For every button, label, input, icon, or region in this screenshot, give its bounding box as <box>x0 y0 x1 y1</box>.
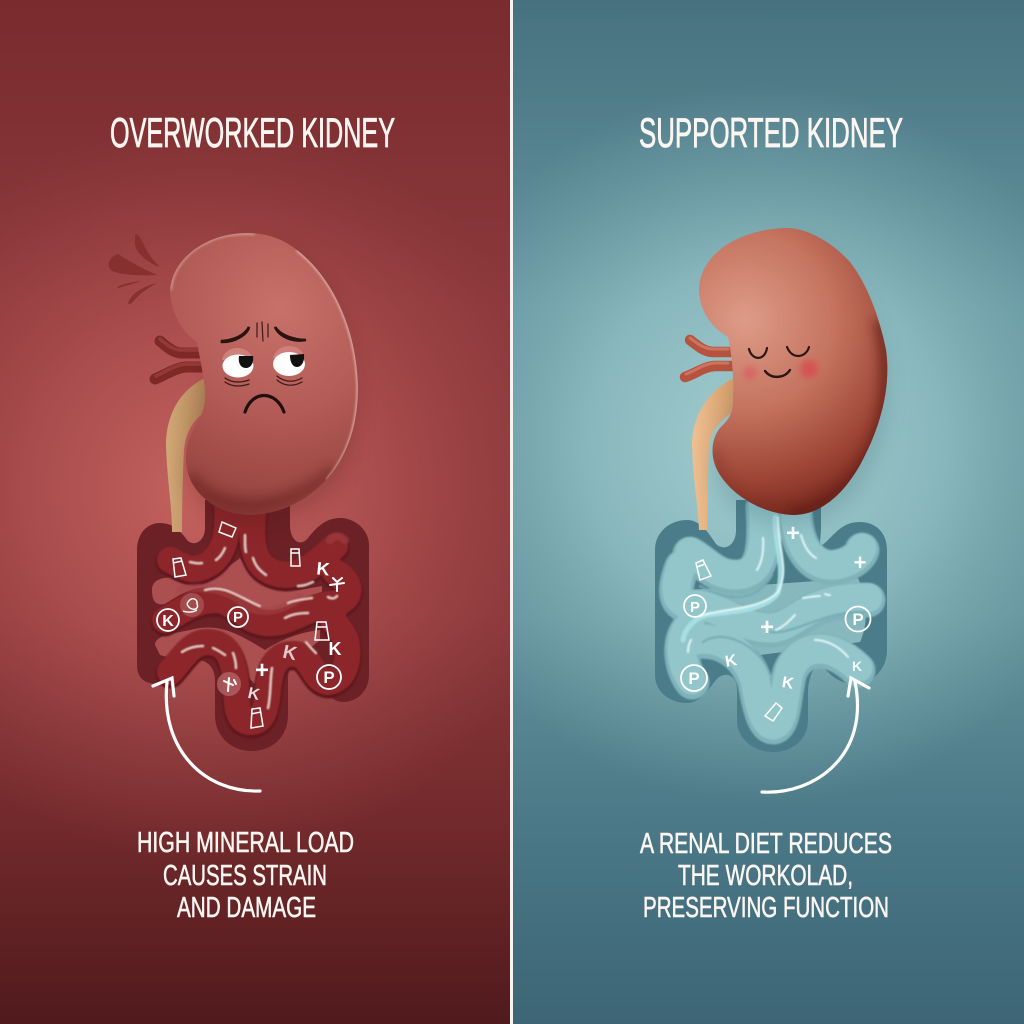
icon: damage clusters <box>180 578 344 696</box>
icon: letter K upper: K <box>316 558 331 580</box>
icon: salt shakers <box>696 560 782 721</box>
icon: circled P right <box>846 606 870 632</box>
icon: circled P left: P <box>690 599 700 616</box>
icon: peaceful face <box>743 347 818 380</box>
icon: circled P lower: P <box>688 669 700 688</box>
icon: mineral symbols reduced <box>681 520 870 721</box>
icon: happy kidney body <box>699 228 887 525</box>
chart: overloaded tubules <box>165 505 349 724</box>
icon: sad kidney body <box>170 233 358 525</box>
icon: right renal vessels <box>685 338 732 377</box>
icon: letter K lower: K <box>246 685 262 704</box>
icon: letter K left: K <box>724 652 739 671</box>
title: overworked kidney: OVERWORKED KIDNEY <box>110 109 395 156</box>
text: overworked caption: HIGH MINERAL LOAD <box>137 827 354 859</box>
panel: overworked kidney <box>0 0 511 1024</box>
icon: circled P upper: P <box>233 609 243 626</box>
icon: tired face <box>222 322 306 412</box>
icon: letter K right: K <box>328 639 342 659</box>
icon: plus: + <box>255 657 269 684</box>
text: supported caption <box>640 828 892 924</box>
icon: circled P upper <box>228 607 248 627</box>
icon: left renal vessels <box>155 339 204 379</box>
icon: letter K faded: K <box>281 642 299 665</box>
icon: circled P lower <box>681 665 707 691</box>
icon: mineral symbols overloaded <box>157 522 344 728</box>
icon: strain burst <box>109 234 160 304</box>
icon: circled K <box>157 609 179 631</box>
chart: clear tubules <box>676 505 868 727</box>
text: overworked caption: CAUSES STRAIN <box>163 860 327 892</box>
icon: tubule gaps <box>152 558 322 690</box>
divider <box>510 0 513 1024</box>
icon: plus upper: + <box>786 520 800 547</box>
icon: circled P lower <box>317 665 341 689</box>
icon: tubule backing shape <box>137 500 369 751</box>
icon: salt shaker group <box>173 522 329 728</box>
text: overworked caption <box>137 827 354 924</box>
arrow: left curved arrow <box>153 678 260 791</box>
panel: supported kidney <box>513 0 1024 1024</box>
icon: circled P right: P <box>852 610 864 629</box>
icon: right tubule backing shape <box>655 500 887 752</box>
icon: plus right: + <box>854 550 866 575</box>
icon: letter K right: K <box>852 658 862 674</box>
icon: right tubule inner fill <box>685 578 866 655</box>
icon: circled P left <box>684 595 706 617</box>
text: supported caption: THE WORKOLAD, <box>678 860 853 892</box>
icon: right ureter <box>692 378 734 530</box>
text: supported caption: A RENAL DIET REDUCES <box>640 828 892 860</box>
icon: circled P lower: P <box>323 668 335 687</box>
text: overworked caption: AND DAMAGE <box>177 892 316 924</box>
icon: plus middle: + <box>760 614 774 641</box>
icon: letter K lower: K <box>781 674 795 693</box>
icon: left ureter <box>166 378 206 532</box>
arrow: right curved arrow <box>762 678 869 792</box>
text: supported caption: PRESERVING FUNCTION <box>643 892 889 924</box>
icon: circled K: K <box>162 613 174 630</box>
